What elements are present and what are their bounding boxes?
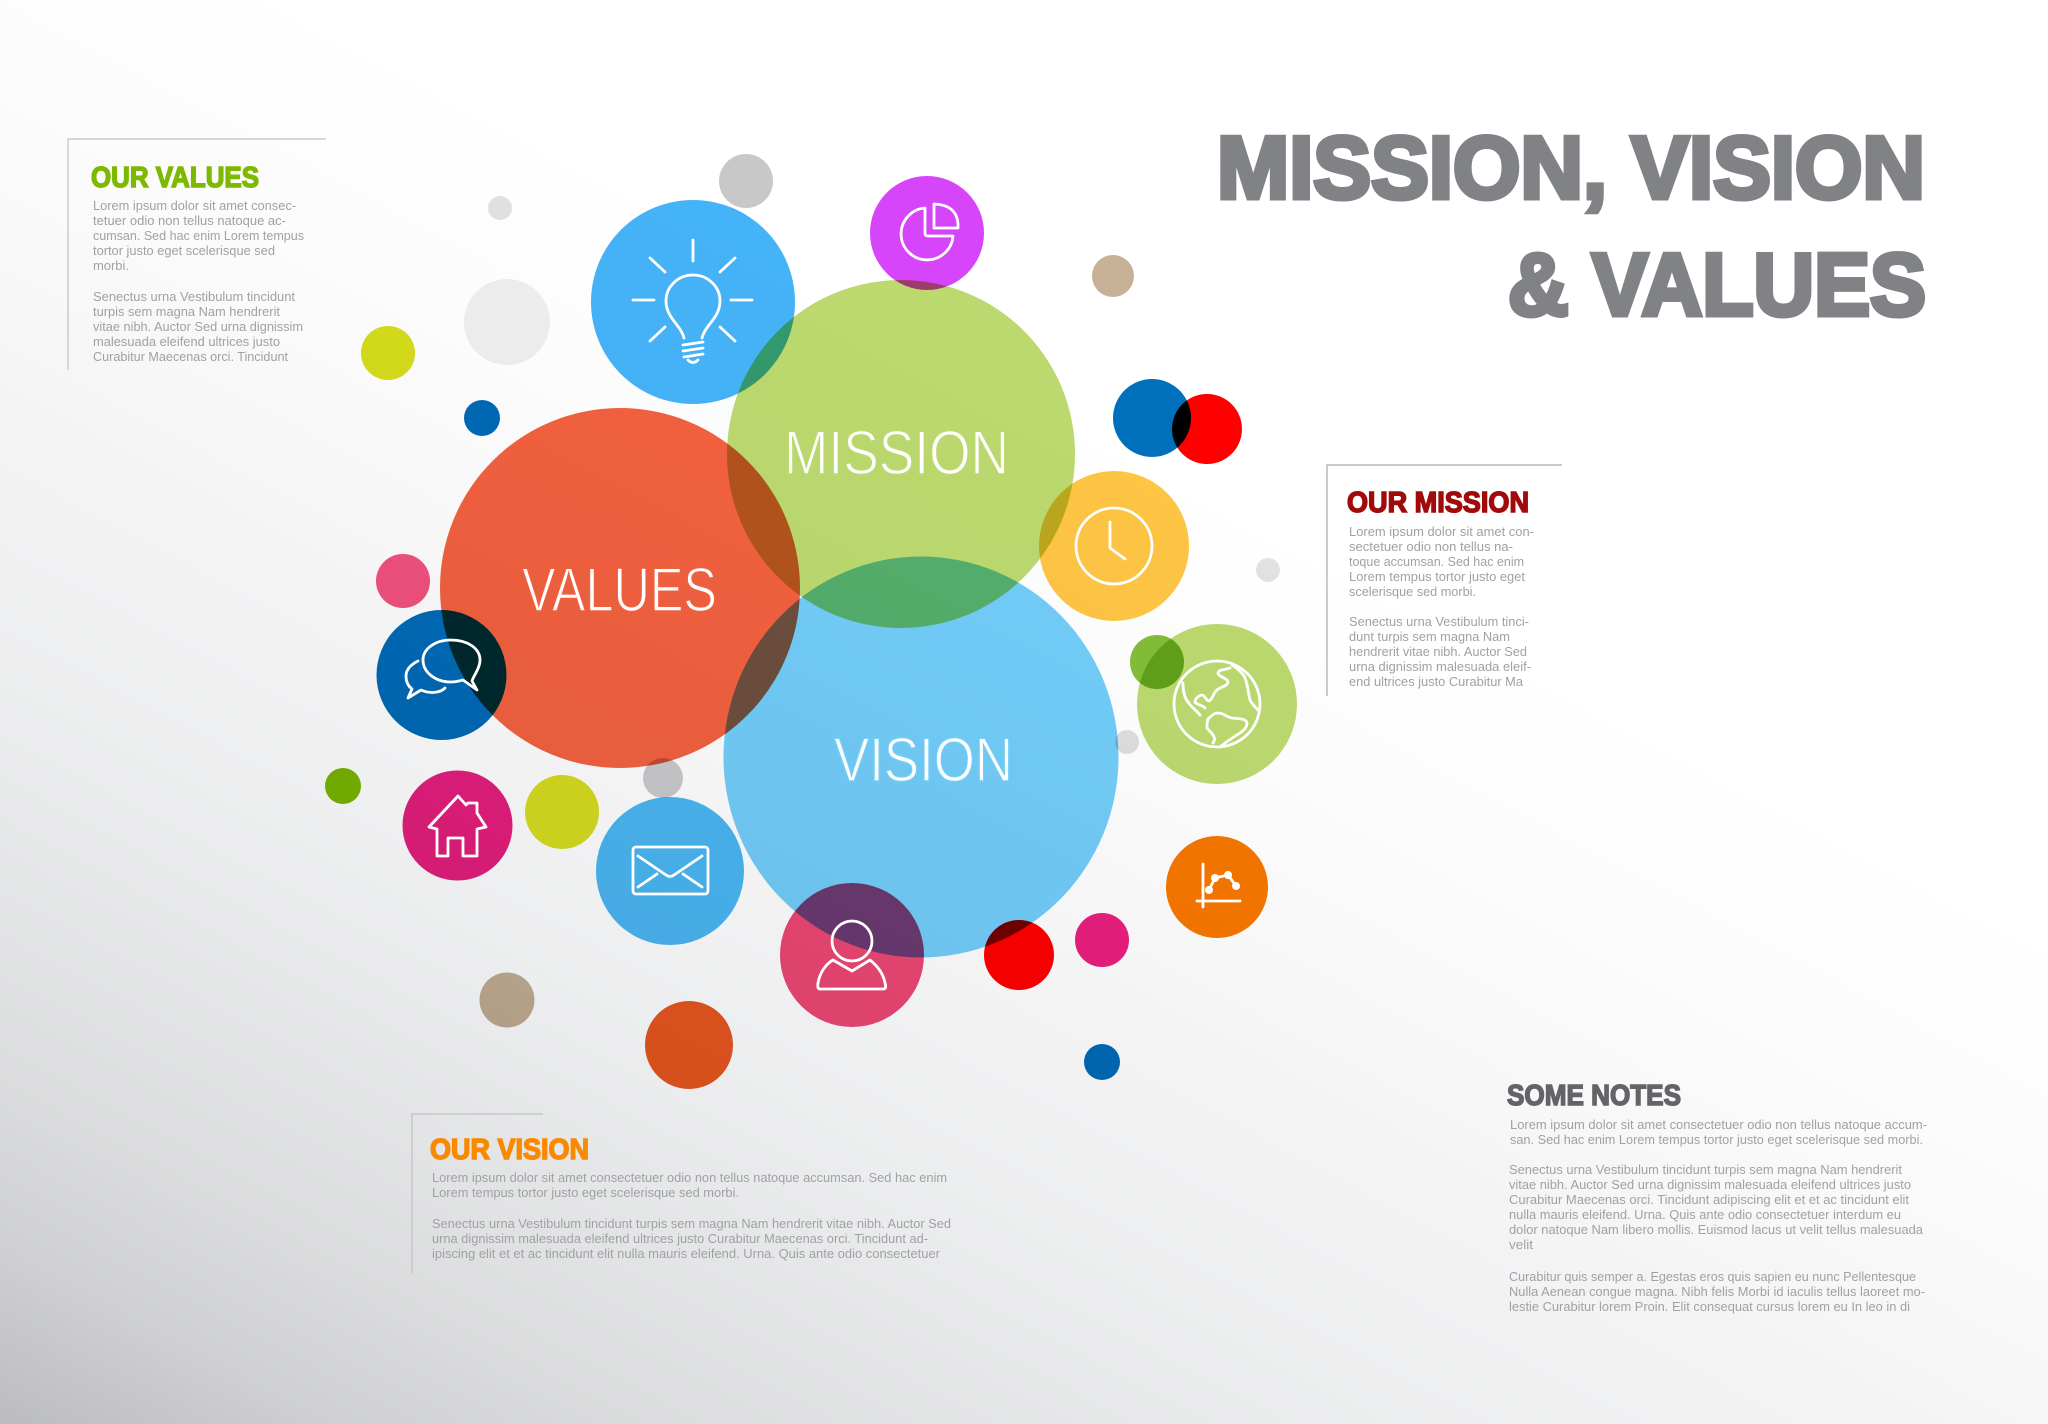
panel: our values — [68, 139, 326, 370]
text: our vision body — [432, 1171, 951, 1261]
text: our values body: turpis sem magna Nam hendrerit — [93, 305, 281, 319]
text: our mission body: Lorem ipsum dolor sit amet con- — [1349, 525, 1534, 539]
text: some notes body: dolor natoque Nam libero mollis. Euismod lacus ut velit tellus malesuada — [1509, 1223, 1923, 1237]
text: some notes body: nulla mauris eleifend. Urna. Quis ante odio consectetuer interdum eu — [1509, 1208, 1901, 1222]
text: some notes body: Curabitur Maecenas orci. Tincidunt adipiscing elit et et ac tincidunt elit — [1509, 1193, 1910, 1207]
text: some notes body: vitae nibh. Auctor Sed urna dignissim malesuada eleifend ultrices justo — [1509, 1178, 1911, 1192]
decorative dots: lower left — [325, 758, 733, 1089]
text: our mission body: toque accumsan. Sed hac enim — [1349, 555, 1524, 569]
text: our values body: Lorem ipsum dolor sit amet consec- — [93, 199, 296, 213]
icon: clock — [1039, 471, 1189, 621]
text: our vision body: Senectus urna Vestibulum tincidunt turpis sem magna Nam hendrerit vitae nibh. Auctor Sed — [432, 1217, 951, 1231]
text: our values body: Senectus urna Vestibulum tincidunt — [93, 290, 296, 304]
text: our values body: tortor justo eget scelerisque sed — [93, 244, 275, 258]
text: our mission body: dunt turpis sem magna Nam — [1349, 630, 1510, 644]
text: our values body: Curabitur Maecenas orci. Tincidunt — [93, 350, 288, 364]
title: MISSION, VISION — [1217, 118, 1925, 217]
text: our values body: tetuer odio non tellus natoque ac- — [93, 214, 286, 228]
text: our mission body: urna dignissim malesuada eleif- — [1349, 660, 1531, 674]
panel: our vision — [412, 1114, 951, 1273]
icon: person — [780, 883, 924, 1027]
text: our mission body: sectetuer odio non tellus na- — [1349, 540, 1513, 554]
text: our values body: morbi. — [93, 259, 129, 273]
decorative dots: lower right — [984, 913, 1129, 1080]
text: our values body: vitae nibh. Auctor Sed urna dignissim — [93, 320, 303, 334]
text: our values body: cumsan. Sed hac enim Lorem tempus — [93, 229, 304, 243]
decorative dots: upper right — [1092, 255, 1280, 754]
text: our mission body: scelerisque sed morbi. — [1349, 585, 1476, 599]
panel: some notes — [1507, 1080, 1927, 1314]
label: vision: VISION — [834, 726, 1013, 795]
text: our values body: malesuada eleifend ultrices justo — [93, 335, 280, 349]
text: our values body — [93, 199, 304, 364]
text: our mission body — [1349, 525, 1534, 689]
label: mission: MISSION — [784, 419, 1009, 488]
text: some notes body: san. Sed hac enim Lorem tempus tortor justo eget scelerisque sed morbi. — [1510, 1133, 1923, 1147]
icon: globe — [1130, 624, 1297, 784]
label: values: VALUES — [522, 556, 717, 625]
icon: speech bubbles — [376, 610, 506, 740]
text: our vision body: urna dignissim malesuada eleifend ultrices justo Curabitur Maecenas orci. Tincidunt ad- — [432, 1232, 928, 1246]
title — [1217, 118, 1926, 334]
text: our vision body: ipiscing elit et et ac tincidunt elit nulla mauris eleifend. Urna. Quis ante odio consectetuer — [432, 1247, 940, 1261]
text: our mission body: Senectus urna Vestibulum tinci- — [1349, 615, 1529, 629]
decorative dots: upper left — [361, 154, 773, 608]
icon: pie chart — [870, 176, 984, 290]
heading: some notes: SOME NOTES — [1507, 1080, 1681, 1112]
icon: envelope — [596, 797, 744, 945]
text: our mission body: end ultrices justo Curabitur Ma — [1349, 675, 1523, 689]
circle: vision — [724, 556, 1118, 958]
text: some notes body: lestie Curabitur lorem Proin. Elit consequat cursus lorem eu In leo in di — [1509, 1300, 1910, 1314]
icon: light bulb — [591, 200, 795, 404]
text: our vision body: Lorem ipsum dolor sit amet consectetuer odio non tellus natoque accumsan. Sed hac enim — [432, 1171, 947, 1185]
circle: mission — [727, 280, 1075, 628]
text: some notes body: Nulla Aenean congue magna. Nibh felis Morbi id iaculis tellus laoreet mo- — [1509, 1285, 1925, 1299]
icon: house — [402, 770, 512, 880]
text: our mission body: Lorem tempus tortor justo eget — [1349, 570, 1526, 584]
text: some notes body: Senectus urna Vestibulum tincidunt turpis sem magna Nam hendrerit — [1509, 1163, 1903, 1177]
text: our mission body: hendrerit vitae nibh. Auctor Sed — [1349, 645, 1527, 659]
text: some notes body: velit — [1509, 1238, 1534, 1252]
heading: our mission: OUR MISSION — [1347, 487, 1529, 519]
heading: our values: OUR VALUES — [91, 162, 259, 194]
circle: values — [440, 408, 800, 768]
heading: our vision: OUR VISION — [430, 1134, 589, 1166]
text: some notes body — [1509, 1118, 1927, 1314]
text: some notes body: Lorem ipsum dolor sit amet consectetuer odio non tellus natoque accum- — [1510, 1118, 1927, 1132]
icon: line chart — [1166, 836, 1268, 938]
panel: our mission — [1327, 465, 1562, 696]
text: our vision body: Lorem tempus tortor justo eget scelerisque sed morbi. — [432, 1186, 739, 1200]
text: some notes body: Curabitur quis semper a. Egestas eros quis sapien eu nunc Pellentesque — [1509, 1270, 1916, 1284]
title: & VALUES — [1508, 235, 1926, 334]
